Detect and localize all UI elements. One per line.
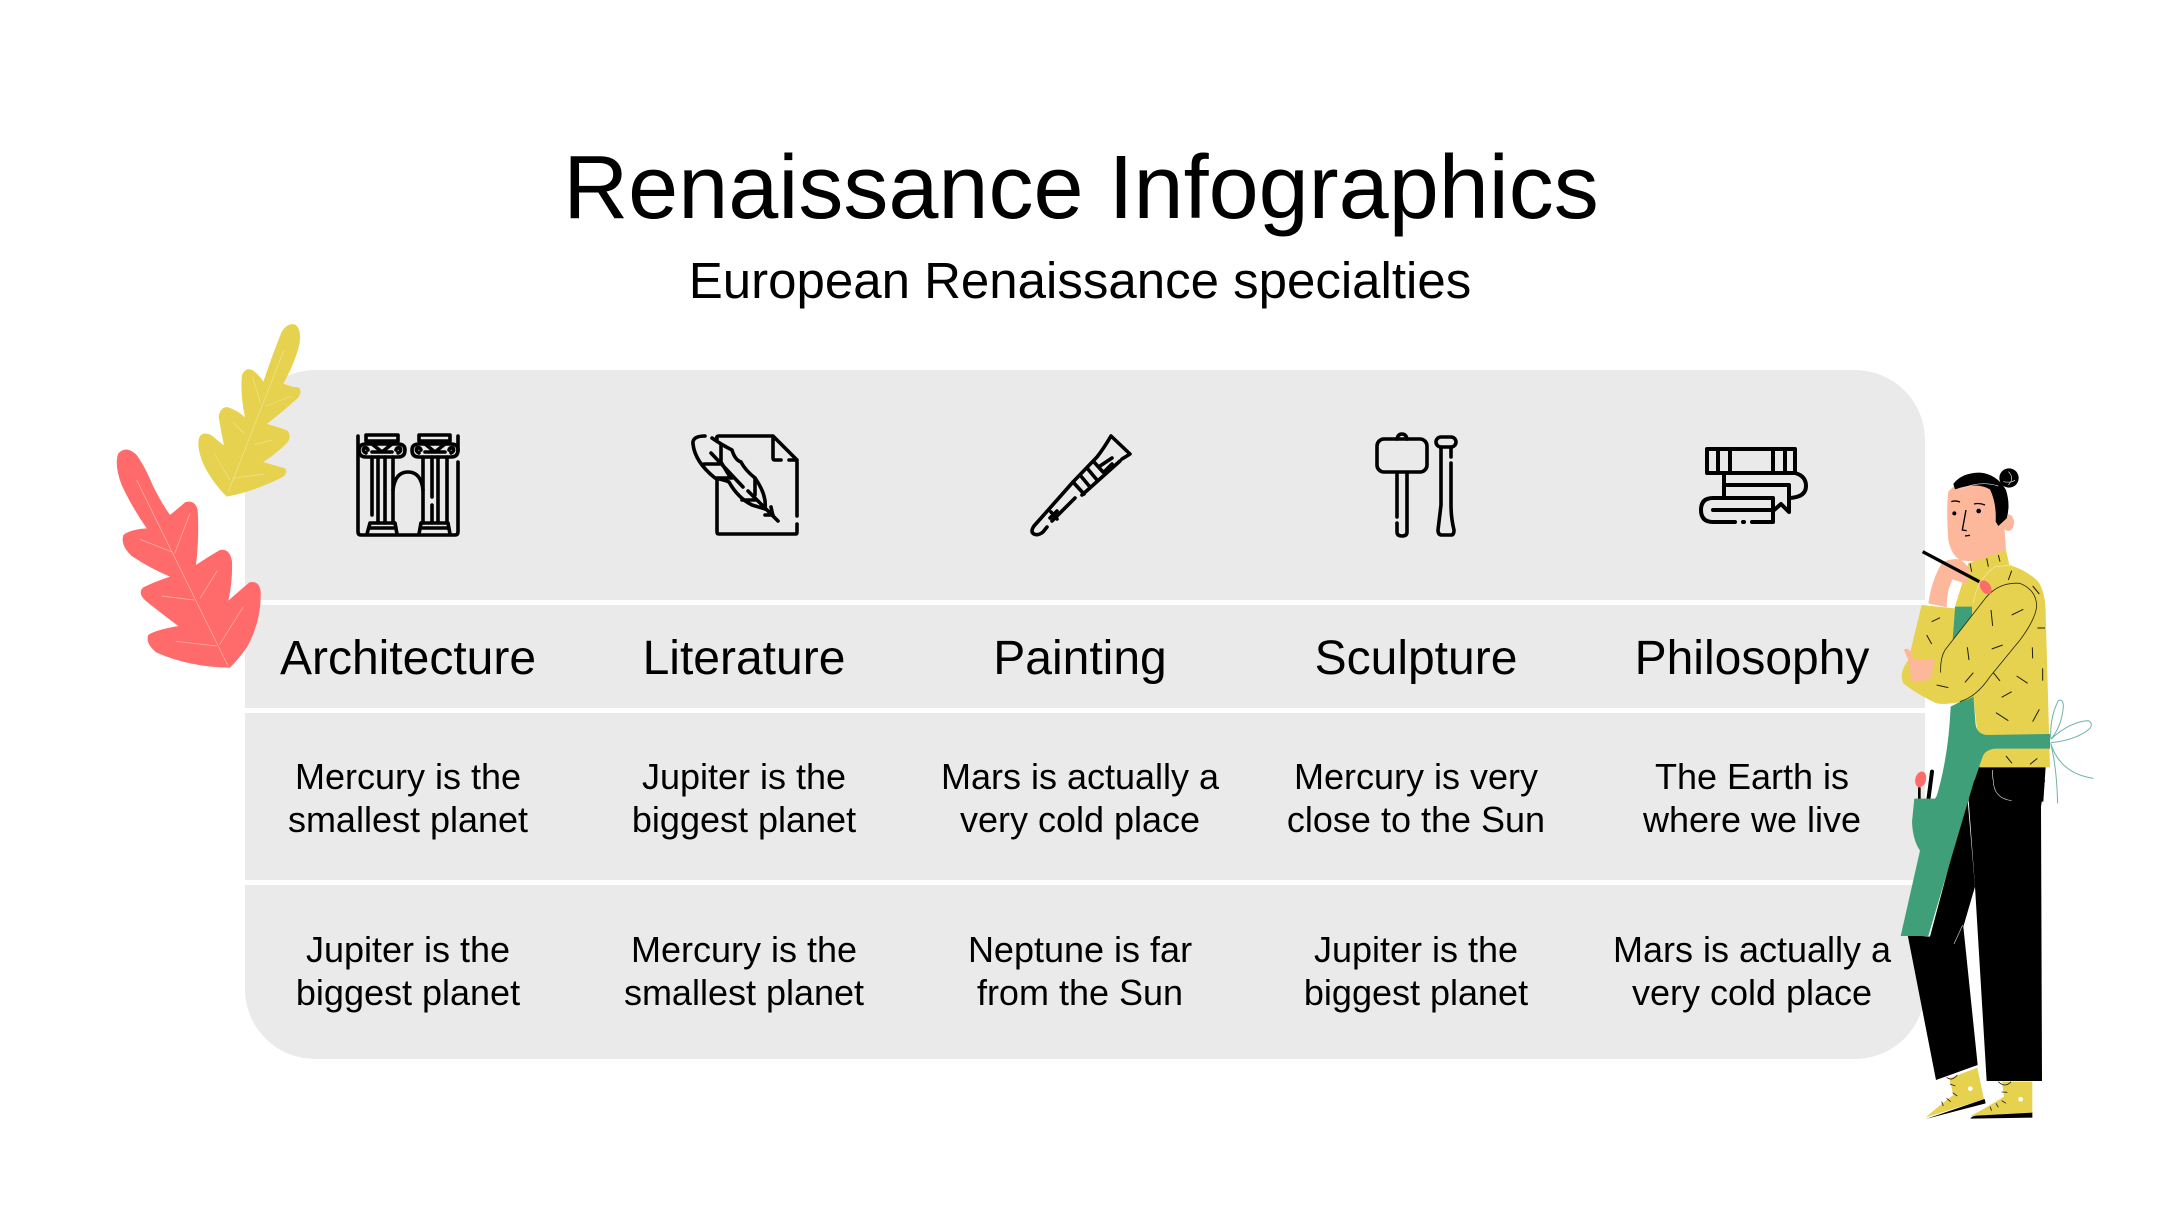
icon: quill on paper (693, 436, 797, 534)
text column: Philosophy: where we live (1642, 799, 1861, 840)
text column: Sculpture (1287, 632, 1545, 1013)
text column: Painting: Painting (993, 632, 1167, 685)
character: thinking artist in apron (1901, 468, 2093, 1119)
title: Renaissance Infographics (563, 138, 1599, 238)
text column: Philosophy: Mars is actually a (1613, 929, 1892, 970)
text column: Philosophy: very cold place (1632, 972, 1872, 1013)
text column: Literature: biggest planet (632, 799, 856, 840)
text column: Architecture: smallest planet (288, 799, 528, 840)
icon: yellow leaf (198, 324, 300, 497)
text column: Literature: smallest planet (624, 972, 864, 1013)
text column: Painting: Mars is actually a (941, 756, 1220, 797)
text column: Painting: Neptune is far (968, 929, 1192, 970)
text column: Architecture: Architecture (280, 632, 536, 685)
text column: Philosophy (1613, 632, 1892, 1013)
text column: Architecture: biggest planet (296, 972, 520, 1013)
character upper body (1902, 468, 2093, 803)
icon: architecture columns (358, 435, 458, 535)
text column: Architecture (280, 632, 536, 1013)
icon: stack of books (1701, 449, 1806, 522)
character legs, apron pocket and shoes (1901, 780, 2045, 1119)
icon: mallet and chisel (1377, 434, 1456, 536)
text column: Sculpture: Jupiter is the (1314, 929, 1518, 970)
text column: Sculpture: Sculpture (1315, 632, 1517, 685)
text column: Literature (624, 632, 864, 1013)
icon: red leaf (117, 450, 261, 668)
text column: Literature: Jupiter is the (642, 756, 846, 797)
panel: table background (245, 370, 1925, 1059)
icon: paint brush (1032, 436, 1130, 535)
text column: Literature: Mercury is the (631, 929, 857, 970)
text column: Architecture: Jupiter is the (306, 929, 510, 970)
text column: Sculpture: biggest planet (1304, 972, 1528, 1013)
subtitle: European Renaissance specialties (689, 252, 1471, 309)
text column: Painting (941, 632, 1220, 1013)
text column: Painting: from the Sun (977, 972, 1183, 1013)
text column: Architecture: Mercury is the (295, 756, 521, 797)
text column: Philosophy: Philosophy (1635, 632, 1869, 685)
text column: Sculpture: close to the Sun (1287, 799, 1545, 840)
text column: Painting: very cold place (960, 799, 1200, 840)
text column: Sculpture: Mercury is very (1294, 756, 1538, 797)
text column: Philosophy: The Earth is (1655, 756, 1849, 797)
text column: Literature: Literature (643, 632, 845, 685)
